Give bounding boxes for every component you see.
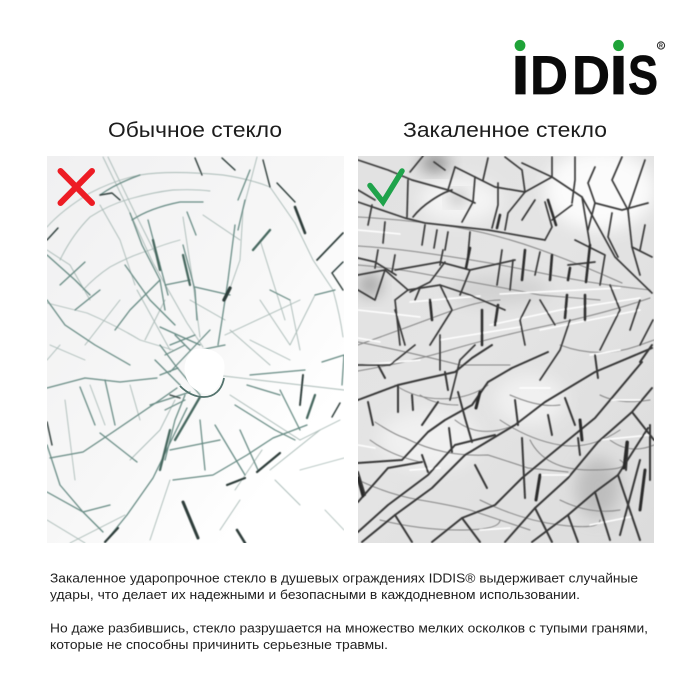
- icon: red cross: [60, 171, 92, 203]
- text block: safety when broken: [50, 621, 648, 652]
- panel: tempered broken glass photo: [358, 150, 655, 543]
- heading: ordinary glass: Обычное стекло: [108, 119, 282, 142]
- text block: tempered glass description: удары, что делает их надежными и безопасными в каждодневном использовании.: [50, 587, 580, 602]
- logo: IDDIS: D: [572, 45, 610, 106]
- logo: IDDIS: S: [628, 45, 658, 106]
- dark crack network: middle: [358, 270, 653, 400]
- icon: green check mark: [370, 171, 402, 202]
- logo: IDDIS: [512, 40, 665, 106]
- logo: IDDIS: D: [530, 45, 568, 106]
- panel: ordinary broken glass photo: [47, 156, 344, 543]
- text block: safety when broken: Но даже разбившись, стекло разрушается на множество мелких осколков с тупыми гранями,: [50, 621, 648, 636]
- text block: safety when broken: которые не способны причинить серьезные травмы.: [50, 637, 388, 652]
- logo: IDDIS: R: [659, 44, 663, 50]
- pale crack edges: [358, 217, 654, 530]
- impact hole: [185, 348, 224, 394]
- dark crack network: upper half: [358, 156, 652, 295]
- heading: tempered glass: Закаленное стекло: [403, 119, 607, 142]
- text block: tempered glass description: Закаленное ударопрочное стекло в душевых ограждениях IDDIS® выдерживает случайные: [50, 570, 638, 586]
- light and dark reflections in the glass: [359, 150, 655, 518]
- dark crack network: long lower diagonals: [358, 345, 654, 542]
- white highlights: [358, 230, 650, 530]
- text block: tempered glass description: [50, 570, 638, 602]
- logo: IDDIS: I: [512, 45, 530, 106]
- logo: IDDIS: I: [610, 45, 628, 106]
